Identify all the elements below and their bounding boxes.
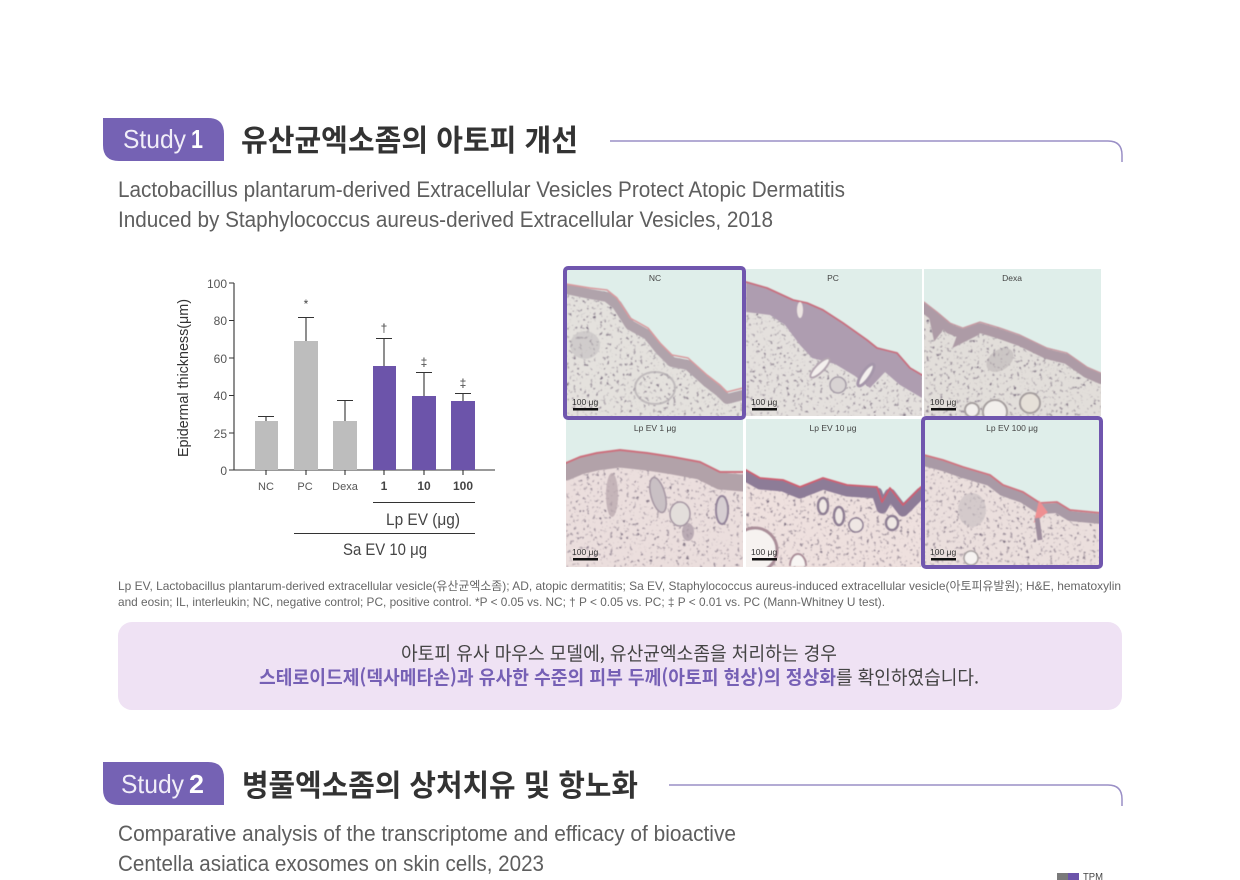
scale bars: 100 μg (751, 397, 777, 407)
legend: TPM (1057, 872, 1103, 880)
significance marks: ‡ (460, 376, 466, 390)
badge: Study 1: 1 (191, 124, 203, 154)
x labels (258, 479, 473, 493)
bars: Lp EV (373, 366, 475, 470)
y axis: 100 (207, 277, 227, 291)
x labels: 10 (417, 479, 431, 493)
histology image grid (565, 268, 1101, 572)
micrograph: Lp EV 1 (566, 419, 743, 567)
heading: study 2 title: 병풀엑소좀의 상처치유 및 항노화 (242, 761, 638, 805)
badge: Study 1 (103, 118, 224, 161)
micrograph: NC (566, 269, 743, 417)
text block: study 2 paper title (118, 821, 736, 876)
footnote: Lp EV, Lactobacillus plantarum-derived extracellular vesicle(유산균엑소좀); AD, atopic dermatitis; Sa EV, Staphylococcus aureus-induced extracellular vesicle(아토피유발원); H&E, hematoxylin (118, 579, 1121, 593)
scale bars (572, 397, 956, 560)
micrograph: Lp EV 1: Lp EV 1 μg (634, 423, 676, 433)
x labels: NC (258, 481, 274, 493)
y axis: 0 (220, 464, 227, 478)
badge: Study 2: Study (121, 769, 184, 799)
group label: Sa EV: Sa EV 10 μg (343, 540, 427, 559)
x labels: 100 (453, 479, 473, 493)
callout: conclusion: 스테로이드제(덱사메타손)과 유사한 수준의 피부 두께(아토피 현상)의 정상화 (259, 663, 836, 690)
highlight frame: NC (565, 268, 744, 418)
micrograph: NC: NC (649, 273, 661, 283)
bar chart: epidermal thickness (176, 277, 495, 559)
y axis: 40 (214, 389, 227, 403)
y axis title: Epidermal thickness(μm) (176, 299, 192, 457)
highlight frame: Lp EV 100 (923, 418, 1101, 567)
scale bars: 100 μg (930, 547, 956, 557)
y axis (207, 277, 495, 478)
significance marks: * (304, 297, 309, 311)
callout: conclusion: 아토피 유사 마우스 모델에, 유산균엑소좀을 처리하는 경우 (401, 639, 837, 666)
micrograph: Dexa: Dexa (1002, 273, 1022, 283)
significance marks (304, 297, 466, 390)
text block: study 2 paper title: Comparative analysis of the transcriptome and efficacy of bioactive (118, 821, 736, 846)
micrograph: Lp EV 10 (733, 419, 921, 572)
scale bars: 100 μg (751, 547, 777, 557)
scale bars: 100 μg (572, 397, 598, 407)
footnote (118, 579, 1121, 609)
callout: conclusion: 를 확인하였습니다. (836, 663, 979, 690)
scale bars: 100 μg (930, 397, 956, 407)
text block: study 1 paper title: Induced by Staphylococcus aureus-derived Extracellular Vesicles, 2018 (118, 207, 773, 232)
y axis: 60 (214, 352, 227, 366)
text block: study 1 paper title (118, 177, 845, 232)
group label: Lp EV: Lp EV (μg) (386, 510, 460, 529)
text block: study 1 paper title: Lactobacillus plantarum-derived Extracellular Vesicles Protect Atopic Dermatitis (118, 177, 845, 202)
micrograph: Dexa (924, 269, 1101, 424)
micrograph: Lp EV 100 (924, 419, 1101, 567)
badge: Study 2: 2 (189, 769, 204, 799)
micrograph: Lp EV 10: Lp EV 10 μg (810, 423, 857, 433)
section header: Study 1 (103, 116, 1122, 162)
x labels: Dexa (332, 481, 359, 493)
y axis: 25 (214, 427, 227, 441)
micrograph: PC: PC (827, 273, 839, 283)
badge: Study 2 (103, 762, 224, 805)
significance marks: † (381, 321, 387, 335)
footnote: and eosin; IL, interleukin; NC, negative control; PC, positive control. *P < 0.05 vs. NC; † P < 0.05 vs. PC; ‡ P < 0.01 vs. PC (Mann-Whitney U test). (118, 595, 885, 609)
group label: Lp EV (373, 502, 475, 529)
error bars (258, 318, 471, 421)
callout: conclusion (118, 622, 1122, 710)
heading: study 1 title: 유산균엑소좀의 아토피 개선 (241, 116, 578, 160)
bars: controls (255, 341, 357, 470)
header rule (610, 141, 1122, 162)
scale bars: 100 μg (572, 547, 598, 557)
micrograph: PC (746, 269, 922, 416)
x labels: 1 (381, 479, 388, 493)
x labels: PC (297, 481, 313, 493)
section header: Study 2 (103, 761, 1122, 806)
header rule (669, 785, 1122, 806)
y axis: 80 (214, 314, 227, 328)
text block: study 2 paper title: Centella asiatica exosomes on skin cells, 2023 (118, 851, 544, 876)
significance marks: ‡ (421, 355, 427, 369)
micrograph: Lp EV 100: Lp EV 100 μg (986, 423, 1038, 433)
badge: Study 1: Study (123, 124, 186, 154)
